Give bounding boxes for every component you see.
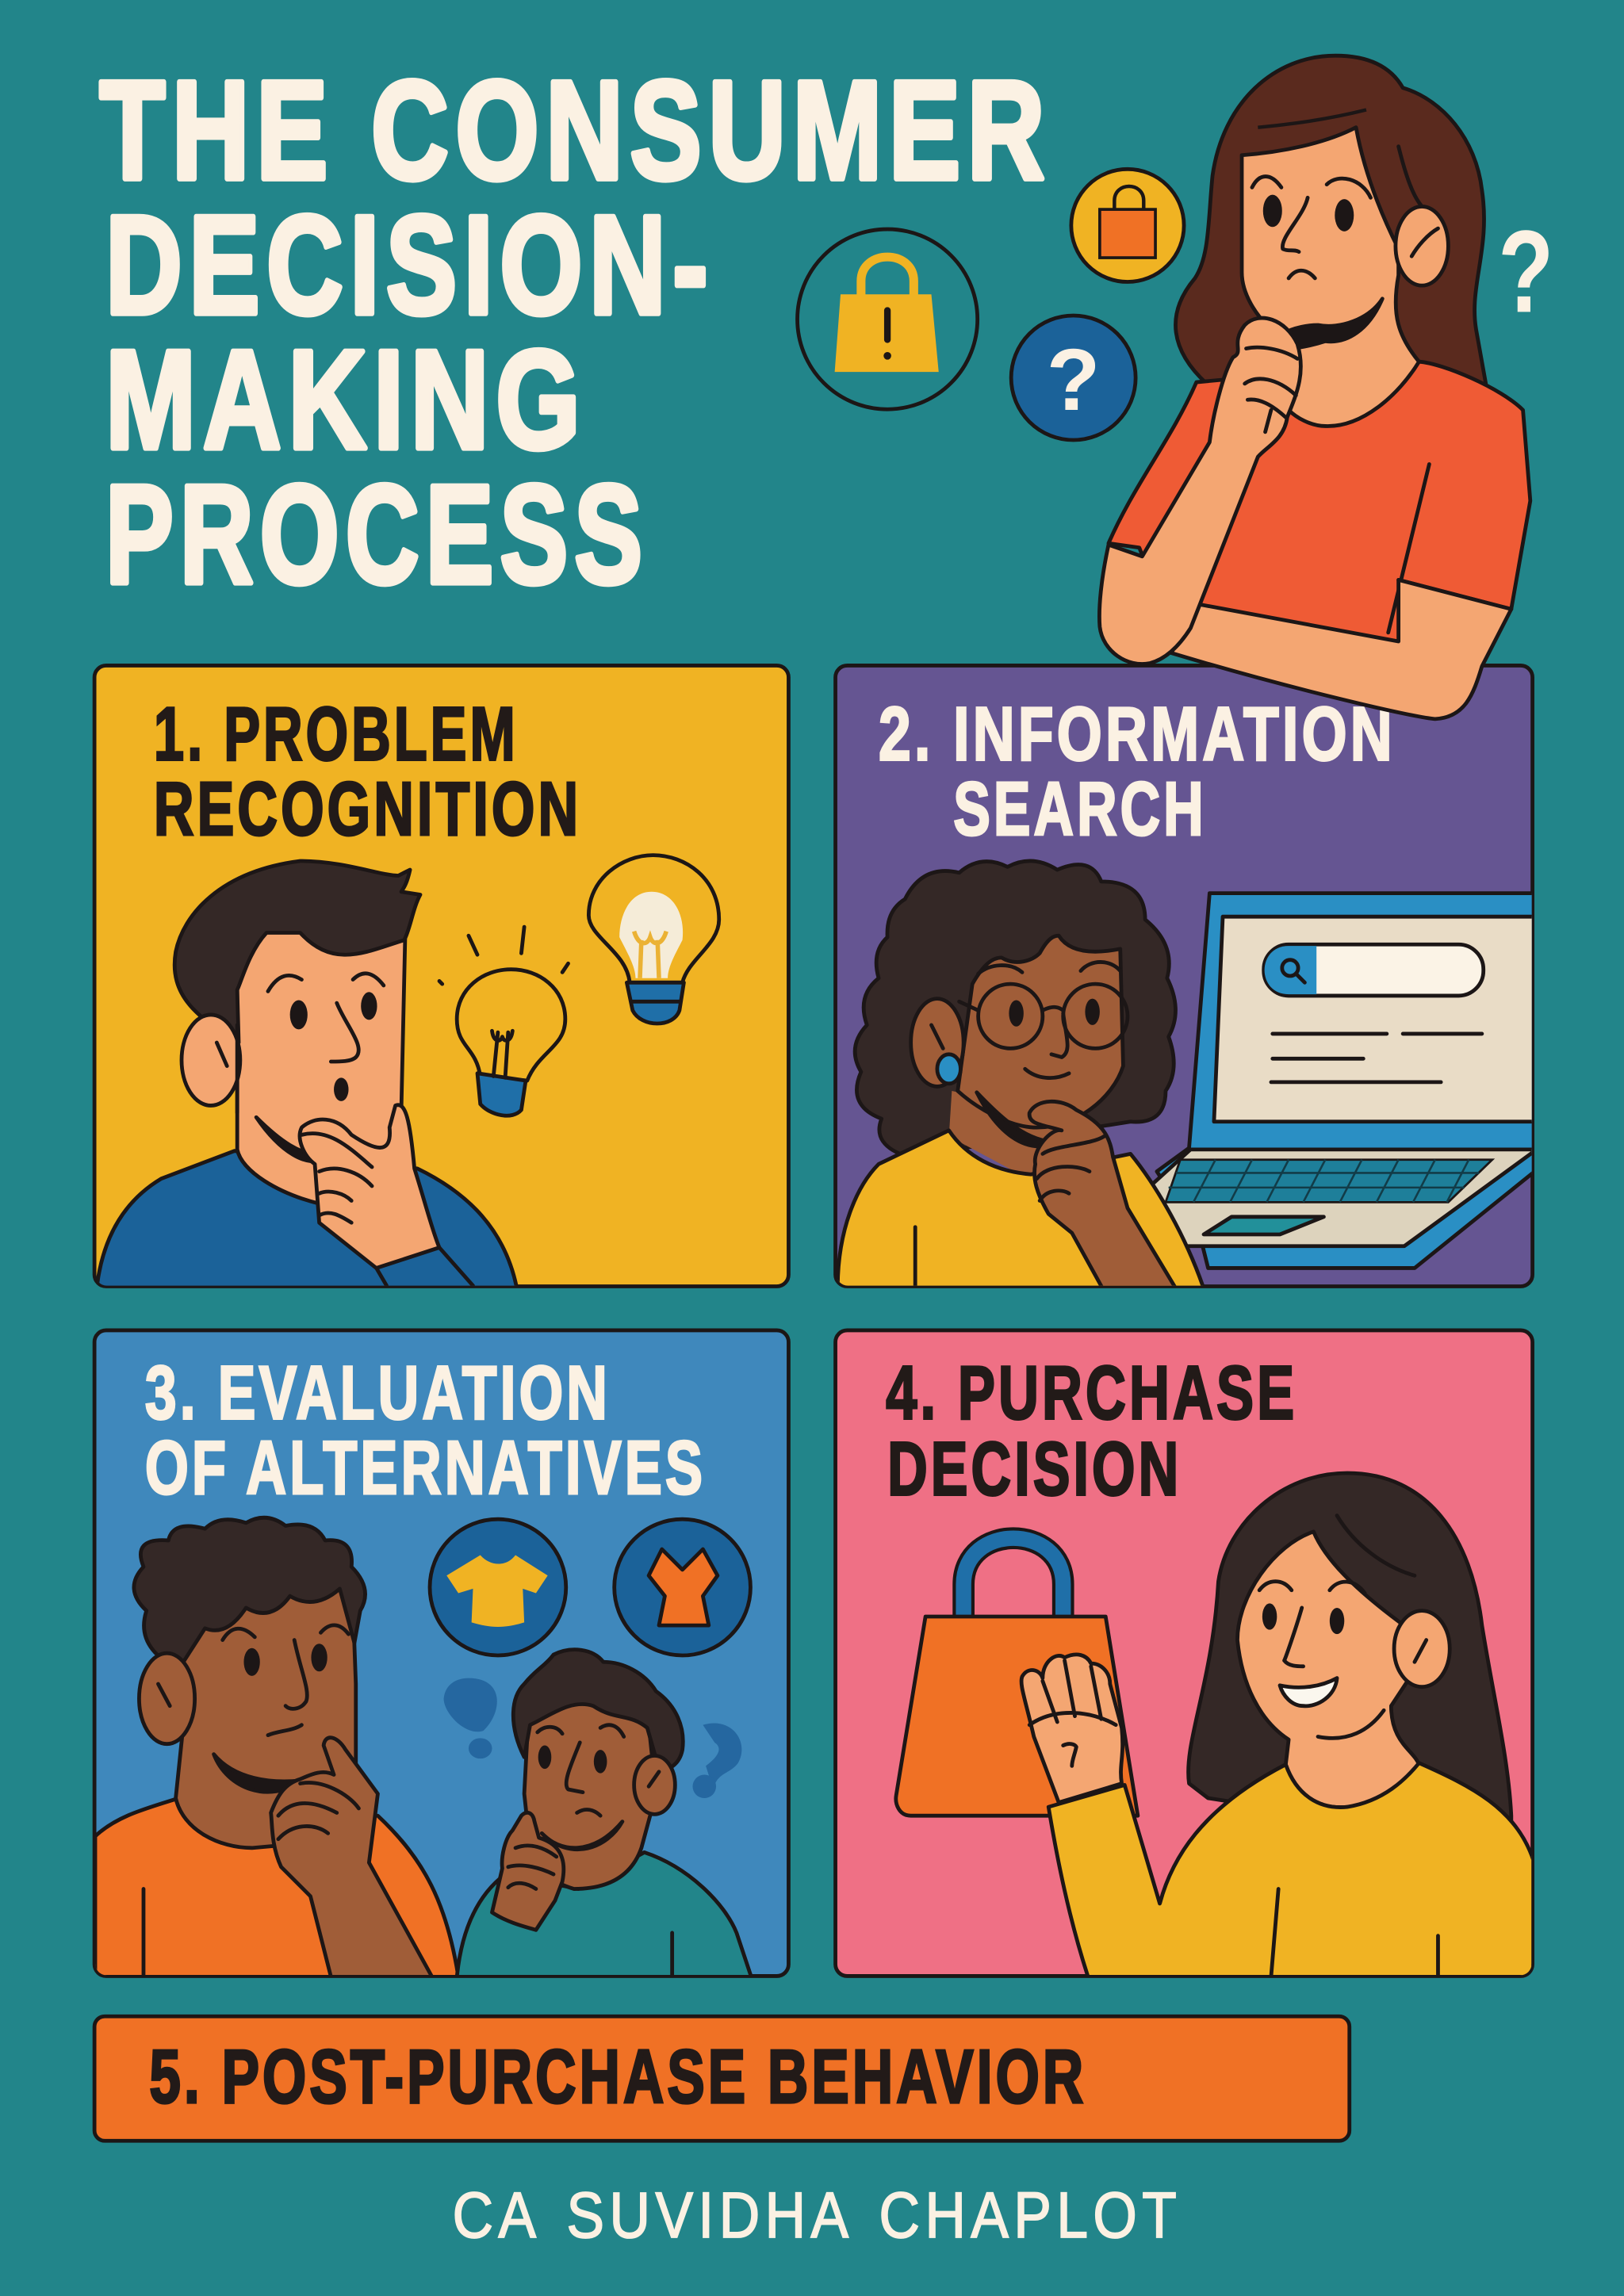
title: PROCESS [105, 456, 649, 613]
panel: 3 evaluation of alternatives [94, 1330, 788, 1976]
icon: question badge [1011, 316, 1136, 440]
footer credit: CA SUVIDHA CHAPLOT [453, 2179, 1182, 2252]
icon: idea rays [439, 927, 569, 984]
heading: step 2 [879, 692, 1396, 851]
illustration: thinking man [97, 861, 517, 1288]
heading: step 3: OF ALTERNATIVES [145, 1425, 706, 1510]
icon: orange dress option [615, 1519, 750, 1655]
title: THE CONSUMER [100, 52, 1051, 209]
panel: 1 problem recognition [94, 665, 788, 1288]
icon: small light bulb [457, 970, 565, 1115]
heading: step 1 [154, 692, 581, 851]
icon: large light bulb [588, 855, 719, 1024]
heading: step 2: SEARCH [953, 767, 1207, 851]
title [100, 52, 1051, 613]
panel: 2 information search [836, 665, 1534, 1288]
illustration: man in orange shirt [95, 1517, 458, 1976]
icon: question badge: ? [1047, 331, 1100, 429]
thought marks [444, 1678, 741, 1798]
heading: step 3: 3. EVALUATION [145, 1351, 611, 1436]
icon: floating question mark: ? [1498, 206, 1553, 337]
title: DECISION- [105, 186, 714, 343]
icon: yellow shirt option [430, 1519, 566, 1655]
icon: raised hand [1021, 1655, 1123, 1803]
heading: step 5: 5. POST-PURCHASE BEHAVIOR [149, 2034, 1086, 2119]
illustration: boy in teal shirt [457, 1650, 751, 1976]
illustration: laptop [1142, 894, 1534, 1268]
heading: step 3 [145, 1351, 706, 1510]
icon: orange bag badge [1071, 169, 1184, 282]
title: MAKING [105, 321, 588, 478]
illustration: smiling woman [1048, 1473, 1534, 1976]
heading: step 2: 2. INFORMATION [879, 692, 1396, 777]
illustration: woman with glasses [837, 861, 1204, 1288]
illustration: thinking woman in red shirt [1099, 55, 1530, 719]
panel: 4 purchase decision [836, 1330, 1534, 1976]
heading: step 1: 1. PROBLEM [154, 692, 519, 777]
icon: padlock shopping bag [798, 229, 978, 409]
heading: step 4: 4. PURCHASE [886, 1351, 1297, 1436]
heading: step 1: RECOGNITION [154, 767, 581, 851]
icon: orange shopping bag [896, 1538, 1138, 1816]
panel: 5 post-purchase behavior [94, 2016, 1350, 2141]
heading: step 4: DECISION [887, 1427, 1182, 1512]
heading: step 4 [886, 1351, 1297, 1512]
